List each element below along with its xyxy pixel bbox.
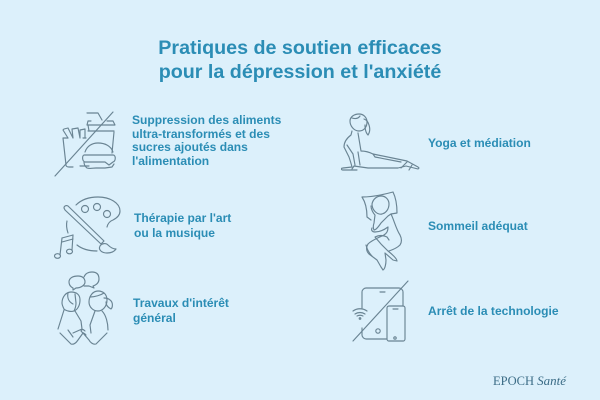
text: community service: Travaux d'intérêt	[133, 296, 229, 310]
icon: yoga	[342, 114, 419, 170]
icon: art and music	[54, 197, 120, 258]
text: suppression: ultra-transformés et des	[132, 127, 270, 141]
text: art therapy: ou la musique	[134, 226, 215, 240]
title: Pratiques de soutien efficaces	[158, 37, 442, 59]
icon: sleep	[362, 192, 402, 270]
text: sleep: Sommeil adéquat	[428, 219, 528, 233]
icon: no processed food	[55, 112, 115, 176]
text: community service	[133, 296, 229, 325]
icon: technology off	[353, 281, 408, 341]
text: suppression: Suppression des aliments	[132, 113, 282, 127]
title: pour la dépression et l'anxiété	[159, 61, 441, 83]
text: suppression: l'alimentation	[132, 154, 209, 168]
text: art therapy	[134, 211, 231, 240]
text: community service: général	[133, 311, 176, 325]
text: yoga: Yoga et médiation	[428, 136, 531, 150]
text: art therapy: Thérapie par l'art	[134, 211, 231, 225]
logo: Epoch Santé: EPOCH Santé	[493, 373, 567, 388]
text: suppression: sucres ajoutés dans	[132, 140, 248, 154]
text: technology off: Arrêt de la technologie	[428, 304, 559, 318]
text: suppression	[132, 113, 282, 168]
icon: community service	[58, 272, 112, 344]
title	[158, 37, 442, 83]
